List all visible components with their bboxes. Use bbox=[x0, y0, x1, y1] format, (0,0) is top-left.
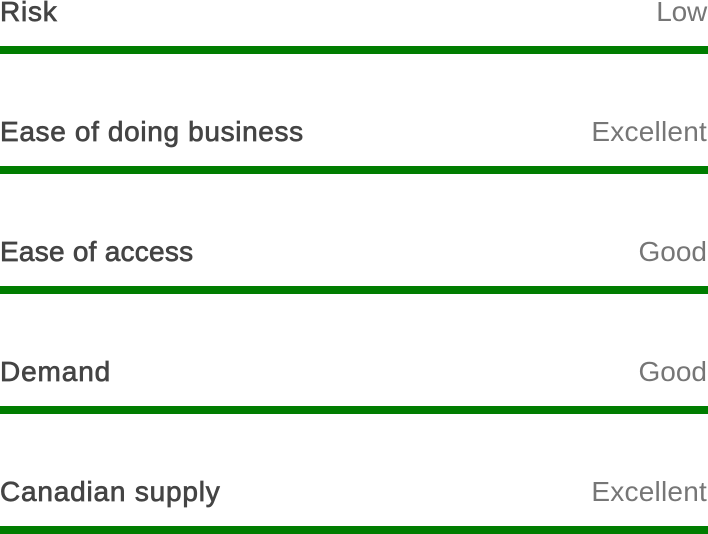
row: Ease of access: Ease of access bbox=[0, 236, 193, 267]
row: Ease of doing business: Ease of doing business bbox=[0, 116, 304, 147]
row: Demand: Good bbox=[638, 356, 707, 387]
row: Demand: Demand bbox=[0, 356, 111, 387]
row: Canadian supply bbox=[0, 476, 708, 534]
row: Ease of doing business: Excellent bbox=[591, 116, 707, 147]
row: Canadian supply: Excellent bbox=[591, 476, 707, 507]
row: Risk bbox=[0, 0, 708, 54]
row: Canadian supply: Canadian supply bbox=[0, 476, 221, 507]
row: Ease of doing business bbox=[0, 116, 708, 174]
row: Ease of access: Good bbox=[638, 236, 707, 267]
row: Ease of access bbox=[0, 236, 708, 294]
row: Demand bbox=[0, 356, 708, 414]
